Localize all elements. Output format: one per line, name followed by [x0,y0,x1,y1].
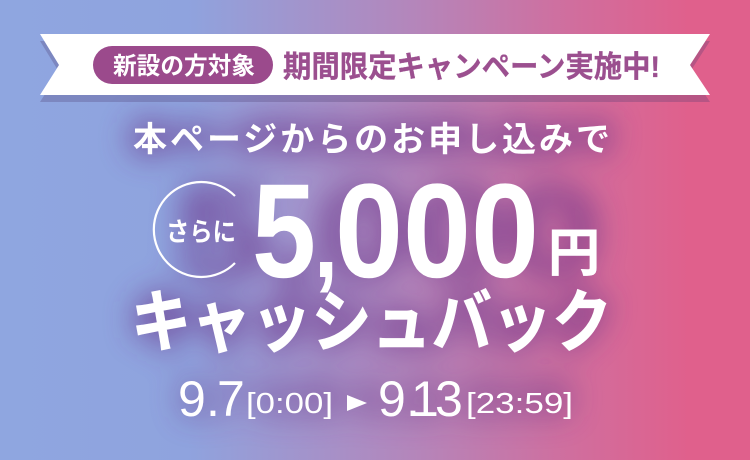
ribbon headline: 期間限定キャンペーン実施中! [283,51,660,84]
ribbon [40,34,710,102]
circle label text: さらに [166,217,236,247]
arrow [347,395,367,411]
digit five: 5 [252,157,316,306]
badge: new subscribers [93,46,273,84]
start date: 9.7 [178,371,245,427]
glow behind text [133,120,610,426]
glow behind text: キャッシュバック [133,288,610,357]
end date: 9.13 [378,371,463,427]
open circle arc [154,182,235,277]
badge: new subscribers: 新設の方対象 [113,53,255,80]
ribbon band [40,34,710,95]
cashback text: キャッシュバック [131,285,612,361]
comma: , [314,187,338,299]
yen sign: 円 [548,225,600,283]
glow behind text: 9.7 0:00 9.13 23:59 [180,370,572,426]
amount 5,000 yen [252,157,600,306]
end time: [23:59] [466,388,573,420]
glow behind text: 5,000 [175,159,600,305]
zeros: 000 [335,157,539,306]
lead text: 本ページからのお申し込みで [133,121,610,159]
glow behind text: 本ページからのお申し込みで [133,120,610,157]
circled label [154,182,236,277]
start time: [0:00] [246,388,333,420]
campaign dates [178,371,573,427]
ribbon shadow [40,41,710,102]
